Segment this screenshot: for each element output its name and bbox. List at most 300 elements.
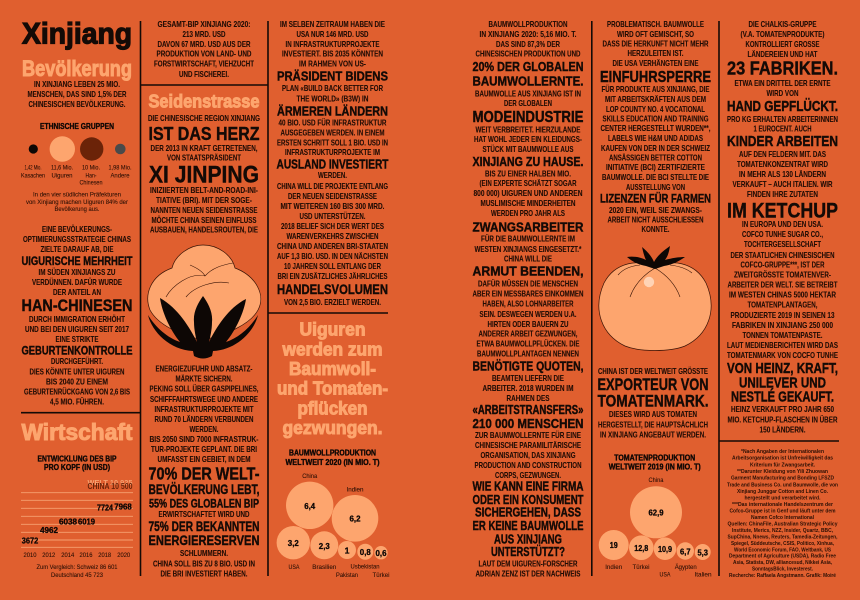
text block: Belt and Road intro: NANNTEN NEUEN SEIDENSTRASSE: [150, 206, 258, 215]
column: Bevölkerung: [21, 18, 133, 579]
text block: Biden plan: BRI EIN ZUSÄTZLICHES JÄHRLICHES: [278, 271, 388, 281]
bubble chart: cotton production: China: [302, 473, 318, 480]
text block: Belt and Road intro: MÖCHTE CHINA SEINEN EINFLUSS: [152, 215, 257, 225]
text block: Belt and Road continued: 70% DER WELT-: [148, 464, 260, 484]
text block: GDP Xinjiang: GESAMT-BIP XINJIANG 2020:: [158, 20, 250, 29]
column: Baumwollproduktion text: HABEN, ALSO LOHNARBEITER: [482, 300, 574, 308]
footnotes and sources: **Darunter Kleidung von Yili Zhuowan: [737, 469, 828, 475]
text block: Belt and Road continued: SCHLUMMERN.: [180, 549, 228, 558]
heading: cotton production chart: [286, 448, 380, 467]
text block: Ketchup: VERKAUFT – AUCH ITALIEN. WIR: [732, 180, 833, 189]
column: Baumwollproduktion text: (EIN EXPERTE SCHÄTZT SOGAR: [479, 178, 577, 188]
chart: GDP per capita: 7724: [97, 502, 113, 512]
text block: Biden plan: PRÄSIDENT BIDENS: [277, 69, 388, 84]
text block: birth control: DIES KÖNNTE UNTER UIGUREN: [30, 366, 125, 376]
chart: ethnic groups circles: Kasachen: [21, 172, 45, 180]
column: Baumwollproduktion text: LAUT DEM UIGUREN-FORSCHER: [478, 560, 578, 568]
column: Einfuhrsperre text: [600, 20, 711, 234]
text block: Tomatenmark export: [598, 366, 708, 440]
heading: tomato production chart: [609, 454, 701, 472]
text block: Biden plan: [276, 20, 389, 307]
bubble chart: cotton production: Indien: [346, 486, 364, 494]
text block: Biden plan: ERSTEN SCHRITT SOLL 1 BIO. USD IN: [277, 138, 388, 148]
text block: Ketchup: HAND GEPFLÜCKT.: [727, 98, 838, 115]
text block: Ketchup: FINDEN IHRE ZUTATEN: [747, 190, 818, 199]
bubble chart: tomato production: Italien: [694, 572, 712, 578]
bubble chart: tomato production: Indien: [605, 564, 623, 571]
heading: tomato production chart: TOMATENPRODUKTION: [614, 454, 695, 462]
column: Baumwollproduktion text: CORPS, GEZWUNGEN.: [495, 471, 561, 480]
text block: Biden plan: AUSLAND INVESTIERT: [276, 156, 389, 171]
column: Einfuhrsperre text: AUSSTELLUNG VON: [626, 183, 685, 192]
text block: population intro: CHINESISCHEN BEVÖLKERUNG.: [28, 99, 126, 109]
column: Baumwollproduktion text: CHINA WILL DIE: [504, 254, 552, 264]
column: tomato paste text and chart: [598, 366, 708, 472]
note: comparison: Deutschland 45 723: [51, 572, 103, 579]
column: Einfuhrsperre text: EINFUHRSPERRE: [600, 69, 711, 86]
text block: Belt and Road continued: 75% DER BEKANNTEN: [148, 519, 260, 534]
bubble chart: cotton production: Türkei: [372, 572, 390, 579]
text block: Belt and Road intro: INIZIIERTEN BELT-AND-ROAD-INI-: [150, 186, 258, 195]
bubble chart: cotton production: 2,3: [319, 541, 330, 551]
bubble chart: cotton production: Brasilien: [312, 564, 337, 571]
column: Baumwollproduktion text: 20% DER GLOBALEN: [472, 59, 584, 74]
text block: birth control: UIGURISCHE MEHRHEIT: [22, 254, 133, 268]
heading: cotton production chart: BAUMWOLLPRODUKTION: [289, 448, 376, 458]
bubble chart: tomato production: 10,9: [658, 544, 672, 554]
text block: Ketchup: COFCO TUNHE SUGAR CO.,: [742, 230, 823, 239]
text block: Belt and Road intro: AUSBAUEN, HANDELSROUTEN, DIE: [150, 226, 258, 234]
text block: Tomatenmark export: CHINA IST DER WELTWEIT GRÖSSTE: [598, 366, 708, 376]
text block: Biden plan: IN INFRASTRUKTURPROJEKTE: [286, 40, 380, 49]
bubble chart: cotton production: 6,4: [304, 501, 315, 511]
footnotes and sources: Trade and Business Co. und Baumwolle, die von: [727, 482, 838, 488]
chart: GDP per capita: 6038: [59, 516, 77, 526]
text block: Biden plan: IM RAHMEN VON US-: [299, 60, 366, 68]
text block: Belt and Road intro: DIE CHINESISCHE REGION XINJIANG: [148, 114, 260, 123]
text block: birth control: IM SÜDEN XINJIANGS ZU: [38, 267, 116, 277]
text block: Biden plan: WARENVERKEHRS ZWISCHEN: [286, 232, 379, 241]
footnotes and sources: ***Das internationale Handelszentrum der: [732, 502, 833, 508]
chart: GDP per capita: 2018: [98, 552, 112, 559]
bubble chart: cotton production: Usbekistan: [350, 564, 380, 570]
column: Einfuhrsperre text: BAUMWOLLE. DIE BCI STELLTE DIE: [602, 173, 709, 182]
text block: Biden plan: CHINA WILL DIE PROJEKTE ENTLANG: [277, 182, 388, 191]
heading: GDP chart: [38, 454, 117, 472]
text block: Biden plan: INFRASTRUKTURPROJEKTE IM: [285, 148, 380, 157]
heading: Seidenstrasse: Seidenstrasse: [148, 90, 260, 111]
text block: birth control: EINE STRIKTE: [56, 335, 99, 344]
text block: Ketchup: HEINZ VERKAUFT PRO JAHR 650: [731, 405, 834, 414]
column: Einfuhrsperre text: FÜR PRODUKTE AUS XINJIANG, DIE: [602, 84, 710, 94]
text block: Biden plan: WERDEN.: [318, 171, 347, 180]
heading: Uiguren gezwungen: Baumwoll-: [289, 359, 376, 379]
text block: Belt and Road continued: PEKING SOLL ÜBER GASPIPELINES,: [150, 384, 258, 394]
text block: Ketchup: FABRIKEN IN XINJIANG 250 000: [732, 321, 833, 330]
text block: birth control: ZIELTE DARAUF AB, DIE: [40, 245, 114, 254]
bubble chart: tomato production: Ägypten: [675, 563, 697, 571]
chart: GDP per capita: 4962: [40, 525, 58, 535]
column: Baumwollproduktion text: BAUMWOLLE AUS XINJIANG IST IN: [475, 90, 581, 98]
footnotes and sources: Spiegel, Süddeutsche, CSIS, Politico, Xinhua,: [731, 541, 834, 547]
text block: Biden plan: VON 2,5 BIO. ERZIELT WERDEN.: [284, 298, 381, 307]
text block: Ketchup: [727, 20, 838, 434]
chart: ethnic groups circles: 1,98 Mio.: [108, 164, 132, 172]
footnotes and sources: Kriterium für Zwangsarbeit.: [750, 462, 815, 468]
column: Einfuhrsperre text: INITIATIVE (BCI) ZERTIFIZIERTE: [606, 163, 705, 172]
heading: Uiguren gezwungen: [277, 319, 388, 438]
text block: Belt and Road continued: 55% DES GLOBALEN BIP: [149, 498, 259, 510]
chart: GDP per capita: 2020: [117, 552, 131, 559]
column: Baumwollproduktion text: DAS SIND 87,3% DER: [496, 40, 560, 49]
text block: Belt and Road continued: ERWIRTSCHAFTET WIRD UND: [158, 510, 250, 519]
heading: Uiguren gezwungen: pflücken: [298, 399, 368, 419]
bubble chart: cotton production: Pakistan: [336, 572, 358, 579]
text block: Belt and Road intro: VON STAATSPRÄSIDENT: [167, 152, 241, 162]
text block: Biden plan: MIT WEITEREN 160 BIS 300 MRD.: [280, 202, 384, 211]
column: Baumwollproduktion text: HIRTEN ODER BAUERN ZU: [488, 320, 569, 329]
column: Baumwollproduktion text: BAUMWOLLPRODUKTION: [488, 20, 568, 29]
column: Baumwollproduktion text: UNTERSTÜTZT?: [491, 544, 565, 559]
bubble chart: cotton production: 6,2: [350, 514, 361, 524]
text block: Biden plan: CHINA UND ANDEREN BRI-STAATEN: [277, 242, 388, 251]
column: Baumwollproduktion text: BAUMWOLLERNTE.: [472, 73, 584, 88]
chart: ethnic groups circles: Uiguren: [52, 172, 73, 180]
bubble chart: tomato production: 19: [610, 540, 618, 550]
footnotes and sources: Garment Manufacturing and Bonding LFSZD: [731, 476, 834, 482]
bubble chart: tomato production: China: [648, 477, 664, 484]
text block: Ketchup: WIRD VON: [766, 89, 799, 98]
column: Baumwollproduktion text: BIS ZU EINER HALBEN MIO.: [485, 170, 571, 178]
heading: cotton production chart: WELTWEIT 2020 (IN MIO. T): [286, 458, 380, 467]
text block: birth control: GEBURTENKONTROLLE: [22, 344, 132, 358]
bubble chart: cotton production: 0,6: [376, 548, 387, 558]
footnotes and sources: Asia, Statista, DW, alliancesud, Nikkei Asia,: [733, 560, 832, 566]
column: Chalkis-Gruppe text: [727, 20, 838, 579]
column: Baumwollproduktion text: AUS XINJIANG: [494, 532, 562, 546]
column: Einfuhrsperre text: SKILLS EDUCATION AND TRAINING: [602, 114, 708, 124]
footnotes and sources: SupChina, Nnews, Reuters, Tamedia-Zeitungen,: [728, 535, 838, 541]
column: Baumwollproduktion text: ZUR BAUMWOLLERNTE FÜR EINE: [475, 430, 581, 440]
text block: Biden plan: ÄRMEREN LÄNDERN: [277, 103, 388, 118]
footnotes and sources: World Economic Forum, FAO, Weltbank, US: [734, 547, 831, 553]
text block: Belt and Road continued: ENERGIERESERVEN: [148, 533, 260, 548]
text block: Ketchup: LÄNDEREIEN UND HAT: [748, 49, 818, 59]
column: Baumwollproduktion text: BAUMWOLLPLANTAGEN NENNEN: [477, 350, 579, 358]
text block: GDP Xinjiang: DAVON 67 MRD. USD AUS DER: [158, 40, 251, 49]
text block: birth control: DURCH IMMIGRATION ERHÖHT: [29, 314, 125, 324]
text block: Belt and Road intro: XI JINPING: [149, 162, 259, 189]
bubble chart: tomato production: 62,9: [648, 508, 664, 518]
column: Einfuhrsperre text: HERZULEITEN IST.: [628, 49, 684, 58]
footnotes and sources: Arbeitsorganisation ist Unfreiwilligkeit das: [732, 456, 833, 462]
chart: GDP per capita: [21, 478, 133, 559]
column: Baumwollproduktion text: BEAMTEN LIEFERN DIE: [492, 374, 564, 383]
note: comparison: [36, 564, 118, 579]
column: Baumwollproduktion text: ARBEITER. 2018 WURDEN IM: [482, 384, 574, 393]
note: prefectures: [26, 192, 129, 213]
text block: Belt and Road intro: [148, 114, 260, 234]
column: Baumwollproduktion text: ABER EIN MESSBARES EINKOMMEN: [472, 290, 584, 298]
heading: Bevölkerung: Bevölkerung: [22, 56, 132, 81]
text block: birth control: 4,5 MIO. FÜHREN.: [50, 396, 104, 406]
text block: Ketchup: IM KETCHUP: [727, 198, 838, 222]
text block: Biden plan: IM SELBEN ZEITRAUM HABEN DIE: [280, 20, 385, 29]
footnotes and sources: Quellen: ChinaFile, Australian Strategic Policy: [728, 522, 838, 528]
heading: tomato production chart: WELTWEIT 2019 (IN MIO. T): [609, 462, 701, 472]
heading: GDP chart: PRO KOPF (IN USD): [44, 463, 110, 472]
text block: Belt and Road continued: TUR-PROJEKTE GEPLANT. DIE BRI: [151, 445, 257, 454]
chart: GDP per capita: 2014: [61, 552, 75, 559]
column: Einfuhrsperre text: DASS DIE HERKUNFT NICHT MEHR: [602, 40, 709, 48]
text block: Biden plan: USD UNTERSTÜTZEN.: [300, 211, 366, 221]
text block: Ketchup: ZWEITGRÖSSTE TOMATENVER-: [734, 270, 831, 280]
bubble chart: tomato production: 5,3: [697, 548, 708, 558]
bubble chart: cotton production: 3,2: [288, 538, 299, 548]
text block: Belt and Road intro: DER 2013 IN KRAFT GETRETENEN,: [151, 144, 257, 153]
text block: Ketchup: COFCO-GRUPPE***, IST DER: [740, 260, 825, 270]
column: Baumwollproduktion text: SEIN. DESWEGEN WERDEN U.A.: [480, 310, 576, 319]
bubble chart: tomato production: 12,8: [634, 543, 648, 553]
text block: Biden plan: AUF 1,3 BIO. USD. IN DEN NÄCHSTEN: [277, 251, 388, 261]
column: Einfuhrsperre text: ANSÄSSIGEN BETTER COTTON: [609, 152, 702, 162]
bubble chart: tomato production: USA: [660, 572, 671, 578]
column: Baumwollproduktion text: RAHMEN DES: [506, 394, 550, 403]
text block: Tomatenmark export: HERGESTELLT, DIE HAUPTSÄCHLICH: [598, 420, 708, 430]
text block: birth control: [22, 224, 133, 406]
text block: Belt and Road intro: TIATIVE (BRI). MIT DER SOGE-: [156, 196, 252, 205]
text block: Ketchup: DIE CHALKIS-GRUPPE: [748, 20, 817, 29]
column: Baumwollproduktion text: CHINESISCHEN PRODUKTION UND: [476, 50, 581, 58]
text block: Belt and Road continued: BIS 2050 SIND 7000 INFRASTRUK-: [150, 435, 259, 444]
footnotes and sources: Recherche: Raffaela Angstmann. Grafik: Moiré: [729, 573, 836, 579]
note: comparison: Zum Vergleich: Schweiz 86 601: [36, 564, 118, 571]
text block: Ketchup: IN EUROPA UND DEN USA.: [742, 220, 823, 229]
column: Bidens plan and Baumwolle: [276, 20, 389, 467]
text block: Ketchup: TONNEN TOMATENPASTE.: [742, 331, 822, 340]
column: Baumwollproduktion text: WIE KANN EINE FIRMA: [472, 480, 584, 494]
column: Baumwollproduktion text: ORGANISATION, DAS XINJIANG: [480, 451, 576, 460]
bubble chart: cotton production: USA: [288, 564, 300, 571]
text block: GDP Xinjiang: PRODUKTION VON LAND- UND: [156, 50, 252, 58]
note: prefectures: Bevölkerung aus.: [54, 206, 100, 213]
text block: Ketchup: KINDER ARBEITEN: [727, 134, 838, 150]
icon: cotton boll: [148, 245, 261, 358]
text block: GDP Xinjiang: [154, 20, 254, 79]
text block: birth control: OPTIMIERUNGSSTRATEGIE CHINAS: [23, 235, 131, 244]
text block: Ketchup: AUF DEN FELDERN MIT. DAS: [739, 150, 826, 159]
column: Baumwollproduktion text: WERDEN PRO JAHR ALS: [491, 209, 565, 218]
column: Baumwollproduktion text: ETWA BAUMWOLLPFLÜCKEN. DIE: [476, 338, 580, 348]
column: Einfuhrsperre text: ARBEIT NICHT AUSSCHLIESSEN: [608, 216, 704, 224]
text block: Biden plan: DER NEUEN SEIDENSTRASSE: [288, 192, 377, 201]
text block: Ketchup: TOMATENPLANTAGEN,: [748, 300, 818, 310]
footnotes and sources: [727, 449, 838, 579]
heading: GDP chart: ENTWICKLUNG DES BIP: [38, 454, 117, 464]
column: Einfuhrsperre text: 2020 EIN, WEIL SIE ZWANGS-: [609, 206, 702, 215]
text block: Belt and Road continued: ENERGIEZUFUHR UND ABSATZ-: [156, 364, 253, 374]
heading: Uiguren gezwungen: werden zum: [282, 339, 382, 359]
column: Baumwollproduktion text: XINJIANG ZU HAUSE.: [472, 155, 584, 169]
column: Baumwollproduktion text: MUSLIMISCHE MINDERHEITEN: [480, 199, 576, 208]
column: Einfuhrsperre text: MIT ARBEITSKRÄFTEN AUS DEM: [605, 94, 706, 104]
text block: Tomatenmark export: IN XINJIANG ANGEBAUT WERDEN.: [600, 430, 706, 440]
column: Baumwollproduktion text: ANDERER ARBEIT GEZWUNGEN,: [478, 330, 578, 338]
text block: Biden plan: 2018 BELIEF SICH DER WERT DES: [281, 222, 384, 231]
heading: Wirtschaft: Wirtschaft: [22, 419, 133, 445]
text block: Ketchup: 150 LÄNDERN.: [760, 424, 806, 434]
column: Einfuhrsperre text: CENTER HERGESTELLT WURDEN**,: [600, 124, 710, 133]
column: Baumwollproduktion text: ZWANGSARBEITER: [472, 219, 584, 234]
text block: Ketchup: 23 FABRIKEN.: [727, 58, 838, 79]
column: Baumwollproduktion text: ER KEINE BAUMWOLLE: [473, 519, 583, 533]
text block: Ketchup: UNILEVER UND: [739, 376, 826, 392]
column: Baumwollproduktion text: ADRIAN ZENZ IST DER NACHWEIS: [476, 570, 581, 578]
column: Baumwollproduktion text: FÜR DIE BAUMWOLLERNTE IM: [481, 234, 575, 244]
column: Baumwollproduktion text: ODER EIN KONSUMENT: [473, 493, 584, 507]
text block: Tomatenmark export: EXPORTEUR VON: [597, 375, 709, 394]
chart: ethnic groups circles: 11,6 Mio.: [51, 164, 73, 172]
column: Einfuhrsperre text: KONNTE.: [642, 225, 670, 234]
column: Einfuhrsperre text: KAUFEN VON DER IN DER SCHWEIZ: [601, 144, 710, 153]
text block: population intro: [28, 80, 127, 109]
text block: birth control: DER ANTEIL AN: [53, 288, 101, 297]
column: Einfuhrsperre text: PROBLEMATISCH. BAUMWOLLE: [607, 20, 704, 29]
column: Einfuhrsperre text: WIRD OFT GEMISCHT, SO: [617, 30, 694, 39]
footnotes and sources: Department of Agriculture (USDA), Radio Free: [729, 554, 836, 560]
text block: Biden plan: INVESTIERT. BIS 2035 KÖNNTEN: [282, 48, 383, 58]
chart: ethnic groups circles: Chinesen: [80, 180, 103, 186]
heading: Uiguren gezwungen: Uiguren: [300, 319, 366, 339]
footnotes and sources: Xinjiang Junggar Cotton and Linen Co.: [737, 489, 828, 495]
text block: birth control: EINE BEVÖLKERUNGS-: [42, 224, 112, 234]
chart: GDP per capita: 6019: [78, 516, 95, 526]
text block: Ketchup: TOMATENKONZENTRAT WIRD: [737, 160, 828, 169]
text block: Biden plan: USA NUR 146 MRD. USD: [296, 30, 369, 39]
column: Baumwollproduktion text: WESTEN XINJIANGS EINGESETZT.*: [474, 245, 582, 254]
column: Baumwollproduktion text: DAFÜR MÜSSEN DIE MENSCHEN: [478, 278, 578, 288]
text block: Tomatenmark export: DIESES WIRD AUS TOMATEN: [609, 410, 697, 419]
footnotes and sources: *Nach Angaben der Internationalen: [741, 449, 824, 455]
chart: GDP per capita: 3672: [22, 536, 38, 546]
column: Baumwollproduktion text: 210 000 MENSCHEN: [472, 416, 584, 431]
text block: Belt and Road continued: INFRASTRUKTURPROJEKTE MIT: [154, 405, 254, 414]
chart: ethnic groups circles: 10 Mio.: [82, 164, 100, 172]
column: Einfuhrsperre text: LOP COUNTY NO. 4 VOCATIONAL: [606, 105, 705, 114]
chart: GDP per capita: 7968: [114, 502, 132, 512]
chart: GDP per capita: 2016: [80, 552, 93, 559]
text block: Belt and Road continued: DIE BRI INVESTIERT HABEN.: [160, 570, 248, 578]
text block: Biden plan: HANDELSVOLUMEN: [277, 282, 388, 297]
note: prefectures: von Xinjiang machen Uiguren 84% der: [26, 199, 129, 206]
text block: Belt and Road continued: [148, 364, 260, 578]
text block: Biden plan: THE WORLD» (B3W) IN: [296, 94, 369, 104]
chart: ethnic groups circles: 1,42 Mio.: [24, 164, 42, 172]
footnotes and sources: Namen Cofco International: [751, 515, 814, 521]
column: Einfuhrsperre text: DIE USA VERHÄNGTEN EINE: [612, 58, 699, 68]
text block: birth control: GEBURTENRÜCKGANG VON 2,6 BIS: [24, 386, 130, 396]
text block: Belt and Road continued: UMFASST EIN GEBIET, IN DEM: [158, 455, 251, 464]
column: Baumwollproduktion text: 800 000) UIGUREN UND ANDEREN: [474, 189, 583, 198]
text block: Tomatenmark export: TOMATENMARK.: [598, 393, 708, 411]
column: Baumwollproduktion text: [472, 20, 584, 578]
text block: birth control: DURCHGEFÜHRT.: [51, 356, 103, 366]
column: Baumwollproduktion text: PRODUCTION AND CONSTRUCTION: [474, 461, 582, 470]
footnotes and sources: Institute, Merics, NZZ, Insider, Quartz, BBC,: [732, 528, 833, 534]
text block: Belt and Road continued: WERDEN.: [190, 425, 218, 434]
text block: population intro: MENSCHEN, DAS SIND 1,5% DER: [28, 90, 127, 99]
text block: Ketchup: ETWA EIN DRITTEL DER ERNTE: [734, 79, 831, 88]
bubble chart: tomato production: Türkei: [632, 564, 650, 571]
column: Baumwollproduktion text: MODEINDUSTRIE: [472, 109, 584, 126]
column: Baumwollproduktion text: WEIT VERBREITET. HIERZULANDE: [476, 126, 581, 134]
text block: Belt and Road continued: CHINA SOLL BIS ZU 8 BIO. USD IN: [153, 560, 255, 568]
column: Baumwollproduktion text: STÜCK MIT BAUMWOLLE AUS: [482, 144, 574, 154]
text block: Biden plan: AUSGEGEBEN WERDEN. IN EINEM: [280, 128, 385, 138]
text block: birth control: UND BEI DEN UIGUREN SEIT 2017: [25, 325, 129, 334]
note: prefectures: In den vier südlichen Präfekturen: [33, 192, 121, 198]
text block: Belt and Road intro: IST DAS HERZ: [148, 123, 260, 144]
bubble chart: cotton production: 0,8: [360, 547, 371, 557]
footnotes and sources: SonntagsBlick, Investerest.: [752, 566, 813, 572]
bubble chart: cotton production: [277, 473, 390, 579]
heading: ethnic groups: ETHNISCHE GRUPPEN: [40, 122, 114, 131]
text block: Belt and Road continued: RUND 70 LÄNDERN VERBUNDEN: [154, 414, 254, 424]
column: Baumwollproduktion text: CHINESISCHE PARAMILITÄRISCHE: [475, 440, 581, 450]
chart: GDP per capita: WELT 10 925: [88, 478, 132, 487]
bubble chart: tomato production: [599, 477, 712, 578]
heading: Uiguren gezwungen: und Tomaten-: [277, 379, 388, 399]
footnotes and sources: hergestellt und verarbeitet wird.: [744, 495, 821, 501]
title: Xinjiang: [22, 18, 132, 50]
text block: GDP Xinjiang: 213 MRD. USD: [182, 30, 226, 39]
text block: Belt and Road continued: BEVÖLKERUNG LEBT,: [148, 482, 260, 497]
bubble chart: cotton production: 1: [345, 546, 350, 556]
text block: Biden plan: 10 JAHREN SOLL ENTLANG DER: [284, 262, 381, 271]
column: Einfuhrsperre text: LIZENZEN FÜR FARMEN: [600, 191, 711, 206]
column: Baumwollproduktion text: BENÖTIGTE QUOTEN,: [472, 358, 584, 373]
text block: Ketchup: 1 EUROCENT. AUCH: [753, 124, 812, 134]
chart: GDP per capita: 2010: [24, 552, 37, 559]
column: Baumwollproduktion text: SICHERGEHEN, DASS: [475, 506, 581, 520]
text block: Ketchup: (V.A. TOMATENPRODUKTE): [740, 30, 825, 39]
chart: ethnic groups circles: Andere: [110, 172, 130, 180]
text block: GDP Xinjiang: FORSTWIRTSCHAFT, VIEHZUCHT: [154, 60, 254, 68]
chart: ethnic groups circles: Han-: [86, 172, 96, 180]
footnotes and sources: Cofco-Gruppe ist in Genf und läuft unter dem: [730, 509, 836, 515]
chart: GDP per capita: CHINA 10 500: [88, 482, 133, 491]
column: Baumwollproduktion text: ARMUT BEENDEN,: [472, 264, 584, 279]
chart: ethnic groups circles: [21, 136, 132, 186]
text block: Ketchup: TOCHTERGESELLSCHAFT: [744, 240, 821, 249]
text block: Ketchup: KONTROLLIERT GROSSE: [746, 40, 820, 49]
text block: Belt and Road continued: MÄRKTE SICHERN.: [176, 374, 232, 384]
text block: Biden plan: 40 BIO. USD FÜR INFRASTRUKTUR: [278, 118, 387, 128]
column: Baumwollproduktion text: DER GLOBALEN: [504, 99, 552, 108]
bubble chart: tomato production: 6,7: [680, 546, 691, 556]
text block: birth control: BIS 2040 ZU EINEM: [46, 378, 108, 386]
column: Seidenstrasse: [148, 20, 260, 578]
text block: Ketchup: IN MEHR ALS 130 LÄNDERN: [739, 169, 826, 179]
icon: tomato: [599, 246, 711, 350]
column: Baumwollproduktion text: HAT WOHL JEDER EIN KLEIDUNGS-: [474, 135, 582, 144]
text block: birth control: VERDÜNNEN. DAFÜR WURDE: [32, 277, 122, 287]
text block: birth control: HAN-CHINESEN: [22, 297, 132, 315]
column: Baumwollproduktion text: «ARBEITSTRANSFERS»: [473, 403, 584, 417]
text block: Belt and Road continued: SCHIFFFAHRTSWEGE UND ANDERE: [150, 395, 258, 404]
text block: Biden plan: PLAN «BUILD BACK BETTER FOR: [282, 84, 383, 93]
chart: GDP per capita: 2012: [42, 552, 56, 559]
